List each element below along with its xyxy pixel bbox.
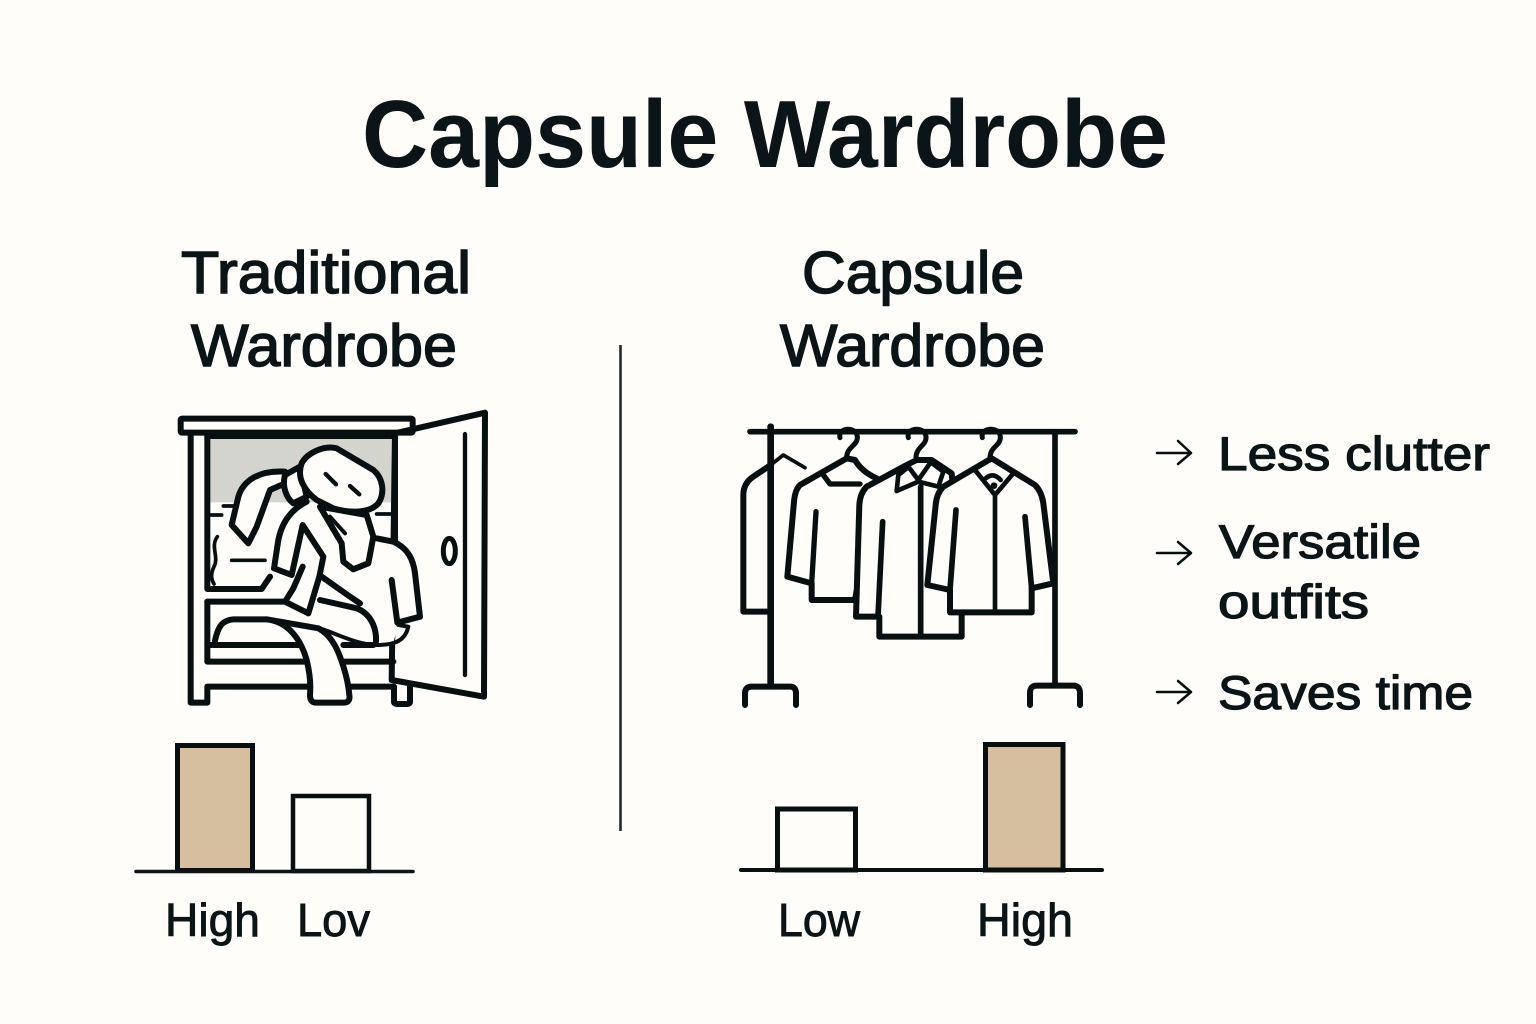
bar: high: [178, 746, 252, 870]
benefit: versatile outfits: outfits: [1218, 575, 1369, 628]
shirt three: [927, 458, 1053, 612]
shirt one: [787, 458, 877, 600]
heading: capsule wardrobe: Capsule: [802, 240, 1024, 306]
label: high: High: [165, 894, 260, 946]
label: low: Low: [778, 894, 861, 946]
shirt two: [856, 460, 962, 637]
arrow: [1157, 681, 1191, 703]
chart baseline: [136, 870, 413, 873]
rack frame: [743, 427, 1080, 705]
benefit: versatile outfits: [1157, 515, 1421, 628]
title: Capsule Wardrobe: [362, 81, 1168, 188]
bar: low: [293, 796, 369, 871]
benefit: saves time: Saves time: [1218, 666, 1473, 719]
label: low: Lov: [297, 894, 370, 946]
arrow: [1157, 441, 1191, 464]
door knob: [443, 538, 455, 564]
heading: traditional wardrobe: Wardrobe: [191, 313, 457, 379]
heading: capsule wardrobe: Wardrobe: [780, 313, 1045, 379]
clothes pile: [232, 448, 420, 703]
heading: traditional wardrobe: Traditional: [181, 240, 471, 306]
label: high: High: [977, 894, 1073, 946]
hangers: [840, 429, 1000, 458]
icon: overflowing wardrobe: [181, 413, 485, 704]
bar chart: traditional wardrobe: [136, 746, 413, 946]
bar chart: capsule wardrobe: [741, 744, 1102, 946]
open door: [392, 413, 485, 697]
door handle: [458, 434, 471, 675]
bar: low: [778, 809, 856, 870]
center divider: [619, 345, 622, 831]
heading: capsule wardrobe: [780, 240, 1045, 379]
chart baseline: [741, 868, 1102, 872]
benefit: less clutter: Less clutter: [1218, 427, 1490, 480]
arrow: [1157, 542, 1191, 564]
benefit: versatile outfits: Versatile: [1219, 515, 1421, 568]
bar: high: [986, 744, 1063, 870]
heading: traditional wardrobe: [181, 240, 471, 379]
icon: clothing rack: [743, 427, 1080, 705]
